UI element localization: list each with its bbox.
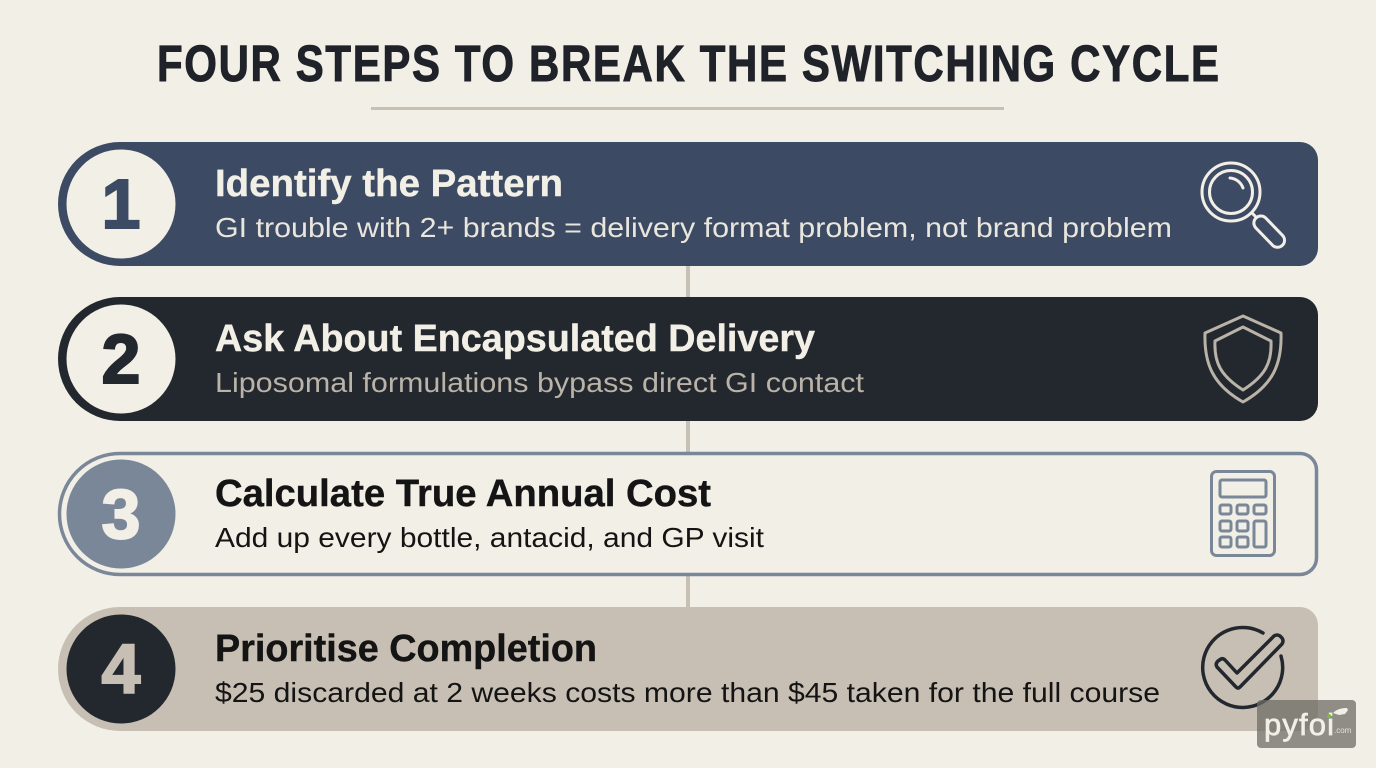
step 1 number badge: 1 <box>102 165 140 243</box>
watermark logo: .com <box>1334 726 1352 735</box>
step 2 description: Liposomal formulations bypass direct GI contact <box>215 367 864 398</box>
icon: shield <box>1205 316 1281 402</box>
step 3 description: Add up every bottle, antacid, and GP visit <box>215 522 764 553</box>
icon: check mark in circle <box>1203 627 1283 707</box>
panel: step 2 <box>58 297 1318 421</box>
watermark logo <box>1257 700 1356 748</box>
step 4 number badge <box>66 614 176 724</box>
panel: step 4 <box>58 607 1318 731</box>
step 1 heading: Identify the Pattern <box>215 163 563 205</box>
step 1 description: GI trouble with 2+ brands = delivery format problem, not brand problem <box>215 212 1172 243</box>
step 2 number badge: 2 <box>102 320 140 398</box>
icon: magnifying glass <box>1202 163 1287 250</box>
panel: step 3 <box>59 454 1316 574</box>
watermark logo: pyfoi <box>1264 707 1334 742</box>
panel: step 1 <box>58 142 1318 266</box>
step 4 number badge: 4 <box>102 630 141 708</box>
step 3 number badge <box>66 460 176 568</box>
step 4 description: $25 discarded at 2 weeks costs more than $45 taken for the full course <box>215 677 1160 708</box>
step 2 heading: Ask About Encapsulated Delivery <box>215 318 815 360</box>
step 2 number badge <box>66 304 176 414</box>
step 4 heading: Prioritise Completion <box>215 628 597 670</box>
title: FOUR STEPS TO BREAK THE SWITCHING CYCLE <box>157 35 1219 92</box>
step 3 number badge: 3 <box>102 475 140 553</box>
step 3 heading: Calculate True Annual Cost <box>215 473 711 515</box>
step 1 number badge <box>66 150 176 258</box>
icon: calculator <box>1212 472 1274 556</box>
